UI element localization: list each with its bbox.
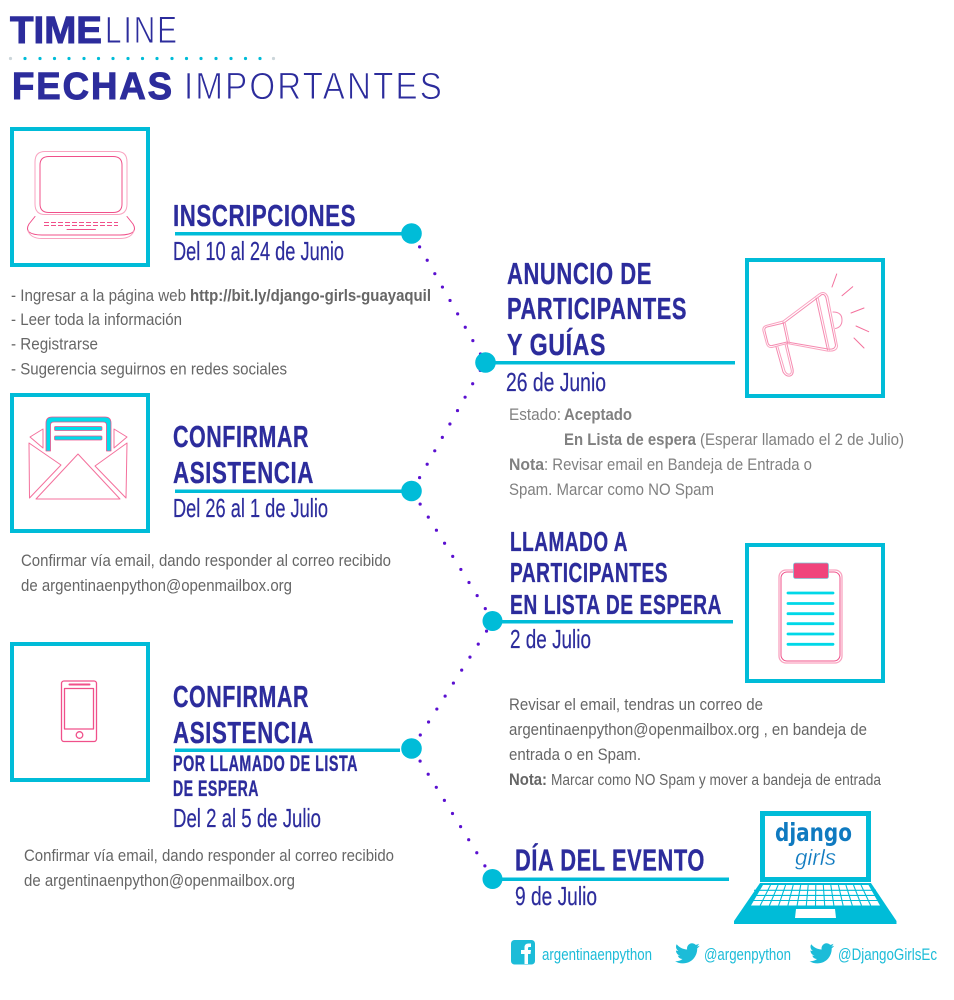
- date: Del 10 al 24 de Junio: [173, 236, 344, 266]
- date: 9 de Julio: [515, 881, 597, 911]
- title: fechas importantes: IMPORTANTES: [184, 66, 444, 108]
- text block: steps: - Leer toda la información: [11, 310, 182, 329]
- text block: de argentinaenpython@openmailbox.org: [24, 871, 295, 890]
- text block: Marcar como NO Spam y mover a bandeja de entrada: [551, 772, 881, 789]
- icon: facebook: [511, 940, 535, 964]
- subheading: DE ESPERA: [173, 776, 259, 801]
- heading: [173, 679, 314, 750]
- text block: estado: [509, 405, 904, 499]
- text block: [21, 551, 391, 595]
- icon: phone: [12, 644, 148, 780]
- date: 2 de Julio: [510, 624, 591, 654]
- date: Del 2 al 5 de Julio: [173, 803, 321, 833]
- text block: estado: Aceptado: [564, 405, 632, 424]
- heading: [173, 419, 314, 490]
- panel: inscripciones: [11, 129, 431, 378]
- title: timeline: TIME: [10, 10, 102, 52]
- timeline bar and node: [175, 738, 422, 759]
- text block: steps: [11, 286, 431, 378]
- panel: anuncio de participantes: [475, 256, 904, 499]
- icon: clipboard: [747, 545, 883, 681]
- panel: confirmar asistencia por llamado: [12, 644, 422, 890]
- timeline bar and node: [482, 869, 729, 889]
- text block: steps: - Registrarse: [11, 334, 98, 354]
- icon: django girls laptop: girls: [795, 845, 836, 870]
- date: 26 de Junio: [506, 367, 606, 397]
- timeline bar and node: [175, 223, 422, 244]
- timeline bar and node: [482, 611, 733, 631]
- timeline bar and node: [175, 481, 422, 501]
- heading: ANUNCIO DE: [507, 256, 652, 291]
- heading: ASISTENCIA: [173, 455, 314, 490]
- date: Del 26 al 1 de Julio: [173, 493, 328, 523]
- text block: [24, 846, 394, 890]
- title: timeline: LINE: [105, 10, 179, 52]
- dotted separator: [9, 57, 275, 60]
- text block: de argentinaenpython@openmailbox.org: [21, 576, 292, 595]
- text block: Confirmar vía email, dando responder al correo recibido: [21, 551, 391, 570]
- text block: estado: En Lista de espera: [564, 430, 696, 449]
- text block: [509, 695, 881, 789]
- title: timeline: [10, 10, 179, 52]
- icon: envelope: [12, 395, 148, 531]
- icon: twitter bird: [675, 943, 700, 963]
- text block: Revisar el email, tendras un correo de: [509, 695, 763, 714]
- social links: [511, 940, 937, 964]
- subheading: POR LLAMADO DE LISTA: [173, 751, 358, 776]
- text block: estado: Spam. Marcar como NO Spam: [509, 480, 714, 499]
- text block: Confirmar vía email, dando responder al correo recibido: [24, 846, 394, 865]
- icon: django girls laptop: [734, 814, 896, 924]
- heading: Y GUÍAS: [507, 327, 606, 362]
- text block: steps: - Ingresar a la página web: [11, 286, 186, 305]
- icon: megaphone: [747, 260, 883, 396]
- text block: estado: Nota: [509, 455, 545, 474]
- icon: twitter bird: [810, 943, 834, 963]
- text block: steps: http://bit.ly/django-girls-guayaquil: [190, 286, 431, 305]
- panel: dia del evento: [482, 814, 896, 924]
- text block: estado: (Esperar llamado el 2 de Julio): [700, 430, 904, 449]
- heading: CONFIRMAR: [173, 679, 309, 714]
- text block: argentinaenpython@openmailbox.org , en bandeja de: [509, 720, 867, 739]
- heading: DÍA DEL EVENTO: [515, 842, 705, 878]
- facebook handle: argentinaenpython: [542, 945, 652, 964]
- heading: ASISTENCIA: [173, 715, 314, 750]
- text block: steps: - Sugerencia seguirnos en redes sociales: [11, 360, 287, 378]
- heading: PARTICIPANTES: [510, 557, 668, 588]
- text block: estado: Estado:: [509, 405, 561, 424]
- panel: llamado a participantes: [482, 526, 883, 789]
- title: fechas importantes: FECHAS: [12, 66, 174, 108]
- panel: confirmar asistencia: [12, 395, 422, 595]
- icon: django girls laptop: django: [775, 818, 852, 847]
- twitter handle: @argenpython: [704, 945, 791, 964]
- timeline bar and node: [475, 352, 735, 373]
- icon: laptop: [12, 129, 148, 265]
- subheading: [173, 751, 358, 801]
- text block: entrada o en Spam.: [509, 745, 641, 764]
- heading: INSCRIPCIONES: [173, 198, 356, 233]
- heading: PARTICIPANTES: [507, 291, 687, 326]
- heading: LLAMADO A: [510, 526, 628, 557]
- dotted timeline connectors: [412, 234, 493, 879]
- title: fechas importantes: [12, 66, 444, 108]
- heading: [510, 526, 722, 620]
- heading: EN LISTA DE ESPERA: [510, 589, 722, 620]
- heading: CONFIRMAR: [173, 419, 309, 454]
- heading: [507, 256, 687, 362]
- text block: estado: : Revisar email en Bandeja de Entrada o: [544, 455, 812, 474]
- text block: Nota:: [509, 770, 547, 789]
